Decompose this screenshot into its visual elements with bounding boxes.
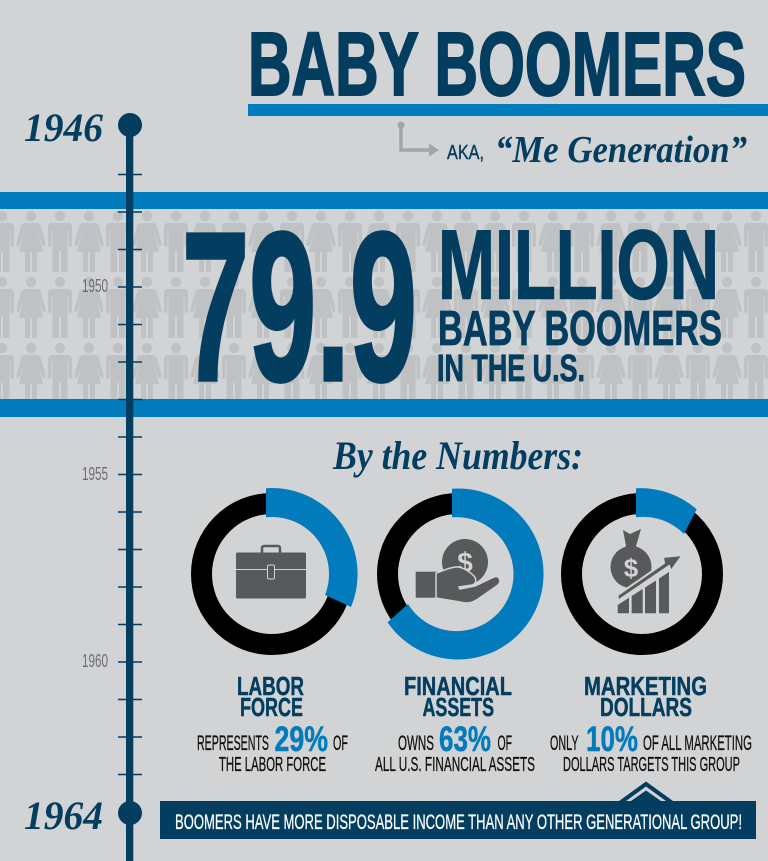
column: financial assets: ALL U.S. FINANCIAL ASSETS xyxy=(375,754,535,776)
column: labor force: THE LABOR FORCE xyxy=(219,754,326,776)
people pattern xyxy=(0,210,768,399)
callout banner xyxy=(160,782,756,839)
icon: hand with coin: $ xyxy=(457,547,473,578)
column: labor force: OF xyxy=(333,732,348,755)
year 1960: 1960 xyxy=(82,651,108,671)
year 1964: 1964 xyxy=(24,793,103,838)
icon: money bag and chart: $ xyxy=(624,553,639,583)
column: marketing dollars: MARKETING xyxy=(584,671,707,701)
column: financial assets xyxy=(375,671,535,776)
timeline line xyxy=(126,125,133,861)
column: labor force: FORCE xyxy=(240,692,303,722)
column: marketing dollars xyxy=(550,671,752,776)
by the numbers heading: By the Numbers: xyxy=(332,433,583,478)
timeline xyxy=(24,105,142,861)
million label: IN THE U.S. xyxy=(437,348,585,390)
million label xyxy=(437,210,722,390)
bottom blue band xyxy=(0,399,768,417)
column: marketing dollars: 10% xyxy=(586,720,638,759)
column: marketing dollars: DOLLARS xyxy=(600,692,692,722)
icon: arrow xyxy=(398,122,439,156)
column: labor force: LABOR xyxy=(237,671,304,701)
column: financial assets: 63% xyxy=(439,720,491,759)
subtitle: AKA, xyxy=(447,142,484,164)
icon: briefcase xyxy=(236,546,306,598)
column: financial assets: OF xyxy=(498,732,512,755)
subtitle: “Me Generation” xyxy=(495,129,747,171)
timeline end dot xyxy=(118,801,142,825)
icon: hand with coin xyxy=(416,539,500,603)
column: marketing dollars: ONLY xyxy=(550,732,578,755)
timeline start dot xyxy=(118,113,142,137)
column: financial assets: ASSETS xyxy=(422,692,494,722)
year 1950: 1950 xyxy=(82,276,108,296)
donut: marketing dollars xyxy=(572,488,712,644)
title underline xyxy=(248,104,768,116)
donut: labor force xyxy=(202,488,358,644)
year 1946: 1946 xyxy=(24,105,103,150)
column: labor force xyxy=(197,671,348,776)
column: labor force: 29% xyxy=(274,720,328,759)
top blue band xyxy=(0,192,768,209)
column: labor force: REPRESENTS xyxy=(197,732,269,755)
year 1955: 1955 xyxy=(82,464,108,484)
donut: financial assets xyxy=(388,488,544,659)
column: financial assets: FINANCIAL xyxy=(404,671,512,701)
timeline ticks xyxy=(118,174,142,774)
icon: money bag and chart xyxy=(610,529,683,613)
column: financial assets: OWNS xyxy=(398,732,434,755)
big number: 79.9 xyxy=(182,188,417,425)
